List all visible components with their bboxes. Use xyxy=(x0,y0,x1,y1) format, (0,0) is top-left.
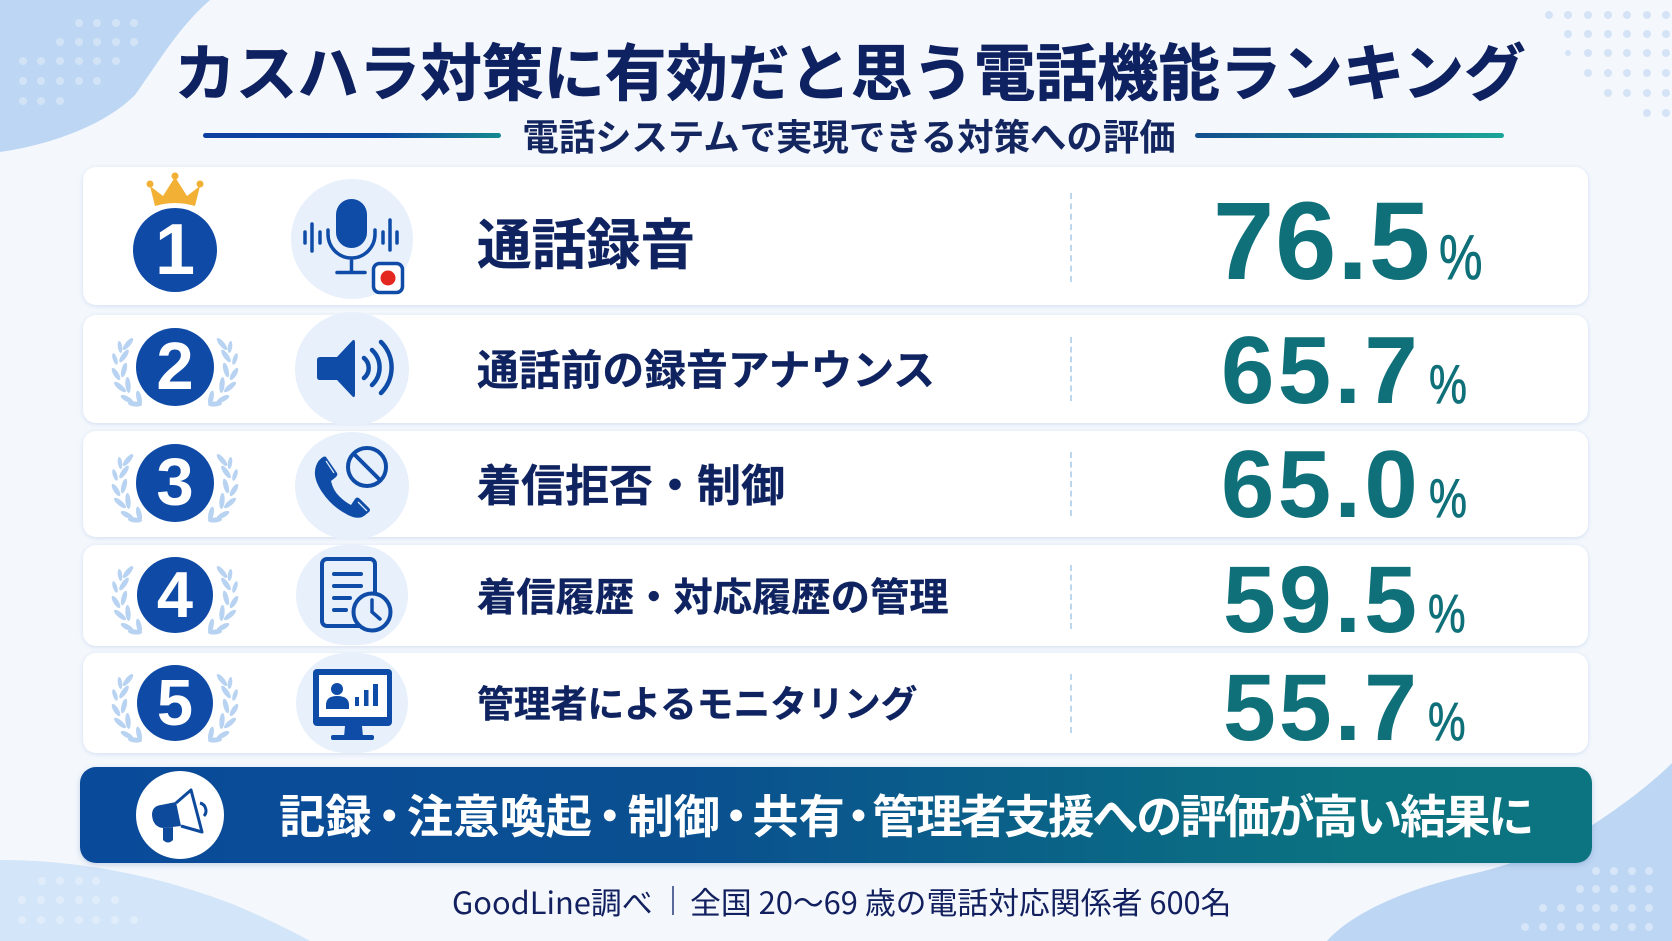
source name: GoodLine調べ xyxy=(452,878,653,923)
icon: microphone recording xyxy=(291,179,413,299)
value 5: 55.7 xyxy=(1223,655,1420,761)
value 5: % xyxy=(1428,692,1465,752)
divider 1 xyxy=(1070,193,1072,282)
laurel 4 xyxy=(112,566,238,635)
rank badge 2 xyxy=(136,328,214,406)
survey description: 全国 20～69 歳の電話対応関係者 600名 xyxy=(690,878,1232,923)
summary banner xyxy=(80,767,1592,863)
value 3: % xyxy=(1429,467,1467,529)
value 2: 65.7 xyxy=(1221,317,1421,424)
icon: megaphone xyxy=(136,771,224,859)
icon: crown xyxy=(146,172,204,206)
divider 4 xyxy=(1070,565,1072,629)
panel: rank 2 row xyxy=(83,315,1588,423)
feature name 1: 通話録音 xyxy=(477,201,695,280)
panel: rank 4 row xyxy=(83,545,1588,646)
rank badge 1 xyxy=(133,208,217,292)
separator xyxy=(672,886,674,915)
panel: rank 5 row xyxy=(83,653,1588,753)
icon: call history document xyxy=(296,545,408,645)
value 2: % xyxy=(1429,353,1467,415)
panel: rank 1 row xyxy=(83,167,1588,305)
rank badge 3 xyxy=(136,444,214,522)
value 1: % xyxy=(1439,223,1483,293)
panel: rank 3 row xyxy=(83,431,1588,537)
divider 3 xyxy=(1070,452,1072,516)
divider 2 xyxy=(1070,337,1072,401)
laurel 3 xyxy=(112,454,238,523)
rank badge 4 xyxy=(137,557,213,633)
value 3: 65.0 xyxy=(1221,431,1421,538)
divider 5 xyxy=(1070,674,1072,733)
icon: monitoring screen xyxy=(296,653,408,753)
feature name 4: 着信履歴・対応履歴の管理 xyxy=(477,566,949,623)
icon: speaker xyxy=(295,312,409,426)
rank badge 2: 2 xyxy=(156,329,194,404)
source note xyxy=(452,878,1232,923)
subtitle rule left xyxy=(203,133,501,138)
laurel 5 xyxy=(112,674,238,743)
value 4: % xyxy=(1428,584,1465,644)
rank badge 3: 3 xyxy=(156,445,194,520)
feature name 5: 管理者によるモニタリング xyxy=(477,674,917,728)
subtitle: 電話システムで実現できる対策への評価 xyxy=(522,109,1176,161)
rank badge 1: 1 xyxy=(155,210,195,290)
icon: call block xyxy=(295,432,409,540)
value 1: 76.5 xyxy=(1213,180,1431,303)
title: カスハラ対策に有効だと思う電話機能ランキング xyxy=(174,24,1526,113)
laurel 2 xyxy=(112,338,238,407)
subtitle rule right xyxy=(1195,133,1504,138)
value 4: 59.5 xyxy=(1223,547,1420,653)
feature name 3: 着信拒否・制御 xyxy=(477,450,785,514)
banner text: 記録・注意喚起・制御・共有・管理者支援への評価が高い結果に xyxy=(279,780,1532,847)
rank badge 4: 4 xyxy=(157,558,193,631)
rank badge 5 xyxy=(137,665,213,741)
rank badge 5: 5 xyxy=(157,666,193,739)
feature name 2: 通話前の録音アナウンス xyxy=(477,338,935,398)
